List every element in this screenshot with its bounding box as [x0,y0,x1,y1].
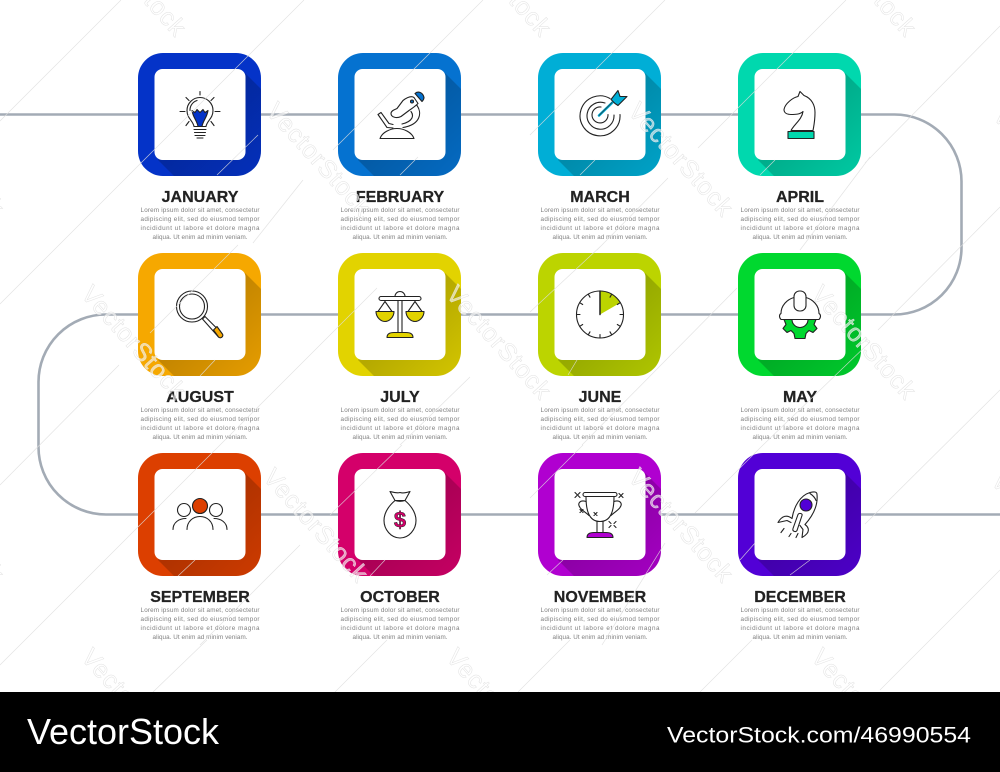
text block: October: Lorem ipsum dolor sit amet, consectetur [340,607,460,614]
icon: clock with wedge [576,291,624,338]
text block: October [340,607,460,641]
text block: September: incididunt ut labore et dolore magna [140,625,260,632]
text block: June: aliqua. Ut enim ad minim veniam. [552,434,648,441]
watermark: VectorStock text: VectorStock [261,97,377,222]
text block: December [740,607,860,641]
text block: July: incididunt ut labore et dolore magna [340,425,460,432]
heading: March: MARCH [570,189,630,206]
watermark: VectorStock text: VectorStock [441,280,557,405]
footer logo text: VectorStock [27,711,220,752]
panel: September [138,453,261,640]
watermark: VectorStock text: VectorStock [258,463,374,588]
November card [538,453,661,576]
text block: July: Lorem ipsum dolor sit amet, consectetur [340,407,460,414]
March card [538,53,661,176]
October card [338,453,461,576]
text block: February: Lorem ipsum dolor sit amet, consectetur [340,207,460,214]
text block: November: Lorem ipsum dolor sit amet, consectetur [540,607,660,614]
text block: March: incididunt ut labore et dolore magna [540,225,660,232]
heading: April: APRIL [776,189,824,206]
text block: April [740,207,860,241]
icon: chess knight [784,92,815,138]
June card [538,253,661,376]
panel: February [338,53,461,240]
text block: February: incididunt ut labore et dolore magna [340,225,460,232]
May card [738,253,861,376]
text block: October: adipiscing elit, sed do eiusmod tempor [340,616,460,623]
heading: October: OCTOBER [360,589,440,606]
text block: September: adipiscing elit, sed do eiusmod tempor [140,616,260,623]
text block: June: Lorem ipsum dolor sit amet, consectetur [540,407,660,414]
January card [138,53,261,176]
text block: March: adipiscing elit, sed do eiusmod tempor [540,216,660,223]
panel: October [338,453,461,640]
text block: May: Lorem ipsum dolor sit amet, consectetur [740,407,860,414]
watermark: VectorStock text: VectorStock [76,280,192,405]
text block: October: aliqua. Ut enim ad minim veniam. [352,634,448,641]
watermark: VectorStock text: VectorStock [806,643,922,768]
icon: money bag [384,492,416,538]
text block: June: incididunt ut labore et dolore magna [540,425,660,432]
panel: August [138,253,261,440]
text block: July: adipiscing elit, sed do eiusmod tempor [340,416,460,423]
icon: magnifying glass [176,291,223,338]
text block: July [340,407,460,441]
text block: December: adipiscing elit, sed do eiusmod tempor [740,616,860,623]
text block: April: Lorem ipsum dolor sit amet, consectetur [740,207,860,214]
watermark: VectorStock text: VectorStock [623,463,739,588]
heading: September: SEPTEMBER [150,589,250,606]
panel: May [738,253,861,440]
text block: February: adipiscing elit, sed do eiusmod tempor [340,216,460,223]
panel: January [138,53,261,240]
heading: June: JUNE [579,389,622,406]
August card [138,253,261,376]
text block: April: incididunt ut labore et dolore magna [740,225,860,232]
heading: December: DECEMBER [754,589,846,606]
icon: rocket [778,492,817,538]
February card [338,53,461,176]
icon: helmet and gear [780,291,820,338]
text block: December: aliqua. Ut enim ad minim veniam. [752,634,848,641]
watermark: VectorStock text: VectorStock [441,643,557,768]
panel: November [538,453,661,640]
text block: February: aliqua. Ut enim ad minim veniam. [352,234,448,241]
connector path [0,114,1000,514]
April card [738,53,861,176]
text block: February [340,207,460,241]
watermark: VectorStock text: VectorStock [76,643,192,768]
text block: March: aliqua. Ut enim ad minim veniam. [552,234,648,241]
text block: August [140,407,260,441]
text block: May: incididunt ut labore et dolore magna [740,425,860,432]
icon: balance scales [376,292,424,338]
panel: December [738,453,861,640]
text block: November: adipiscing elit, sed do eiusmod tempor [540,616,660,623]
text block: January: incididunt ut labore et dolore magna [140,225,260,232]
text block: May: adipiscing elit, sed do eiusmod tempor [740,416,860,423]
icon: microscope [378,92,424,138]
text block: January: aliqua. Ut enim ad minim veniam. [152,234,248,241]
text block: November: aliqua. Ut enim ad minim veniam. [552,634,648,641]
text block: August: incididunt ut labore et dolore magna [140,425,260,432]
text block: May [740,407,860,441]
icon: light bulb [180,92,220,138]
text block: January: adipiscing elit, sed do eiusmod tempor [140,216,260,223]
text block: January [140,207,260,241]
panel: July [338,253,461,440]
text block: March: Lorem ipsum dolor sit amet, consectetur [540,207,660,214]
watermark: VectorStock text: VectorStock [623,97,739,222]
text block: November [540,607,660,641]
text block: March [540,207,660,241]
text block: June [540,407,660,441]
text block: May: aliqua. Ut enim ad minim veniam. [752,434,848,441]
heading: February: FEBRUARY [356,189,444,206]
heading: January: JANUARY [162,189,239,206]
text block: August: Lorem ipsum dolor sit amet, consectetur [140,407,260,414]
July card [338,253,461,376]
September card [138,453,261,576]
text block: August: adipiscing elit, sed do eiusmod tempor [140,416,260,423]
December card [738,453,861,576]
icon: target with dart [580,90,627,136]
text block: October: incididunt ut labore et dolore magna [340,625,460,632]
heading: November: NOVEMBER [554,589,647,606]
heading: May: MAY [783,389,817,406]
text block: April: adipiscing elit, sed do eiusmod tempor [740,216,860,223]
text block: September: Lorem ipsum dolor sit amet, consectetur [140,607,260,614]
heading: August: AUGUST [166,389,234,406]
icon: trophy [575,492,623,538]
text block: August: aliqua. Ut enim ad minim veniam. [152,434,248,441]
text block: July: aliqua. Ut enim ad minim veniam. [352,434,448,441]
text block: September [140,607,260,641]
footer bar [0,692,1000,772]
panel: March [538,53,661,240]
text block: September: aliqua. Ut enim ad minim veniam. [152,634,248,641]
icon: three people [173,498,227,530]
text block: December: incididunt ut labore et dolore magna [740,625,860,632]
panel: June [538,253,661,440]
text block: January: Lorem ipsum dolor sit amet, consectetur [140,207,260,214]
footer image id: VectorStock.com/46990554 [667,722,971,748]
text block: June: adipiscing elit, sed do eiusmod tempor [540,416,660,423]
text block: November: incididunt ut labore et dolore magna [540,625,660,632]
text block: April: aliqua. Ut enim ad minim veniam. [752,234,848,241]
panel: April [738,53,861,240]
icon: money bag: $ [394,508,406,532]
text block: December: Lorem ipsum dolor sit amet, consectetur [740,607,860,614]
heading: July: JULY [380,389,420,406]
watermark: VectorStock text: VectorStock [806,280,922,405]
